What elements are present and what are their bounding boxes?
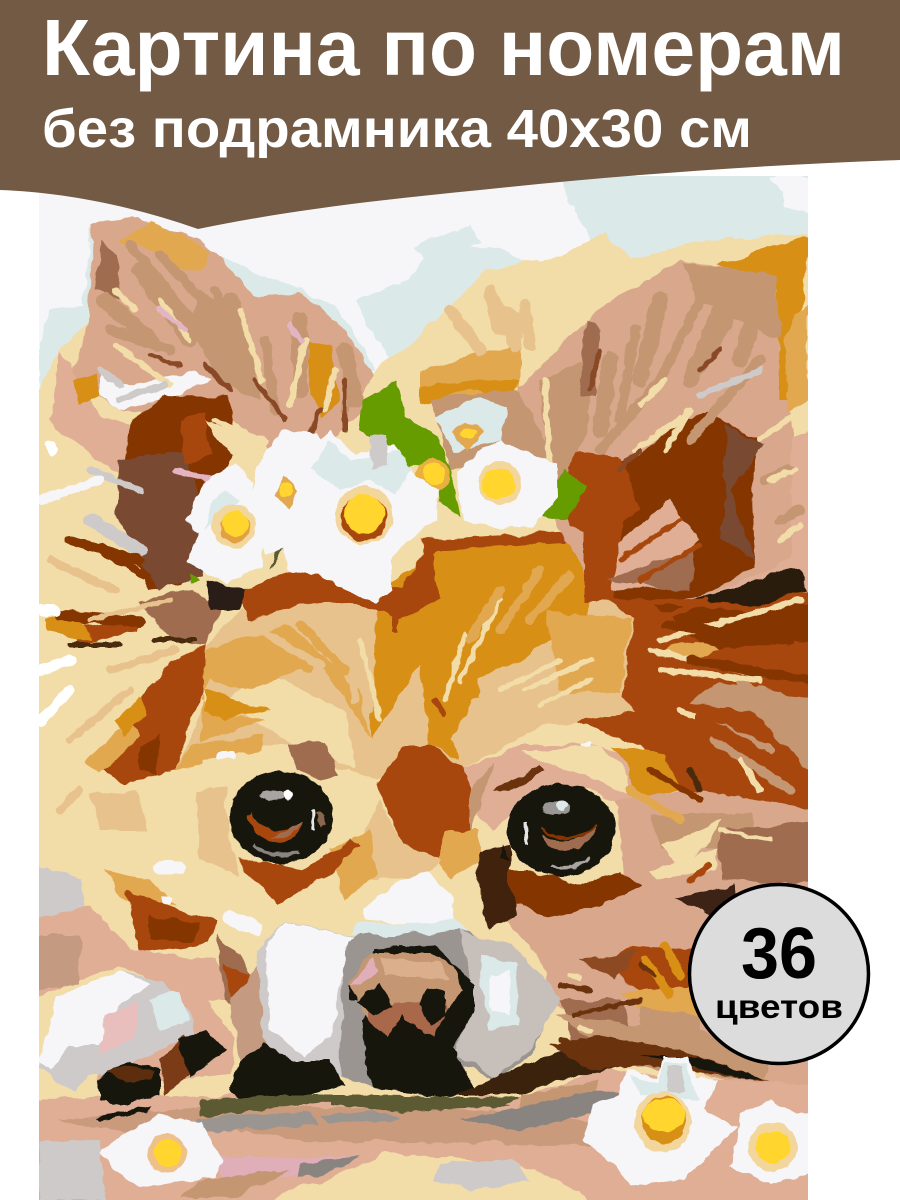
ground details [39, 1112, 600, 1200]
daisy bottom right small [730, 1100, 815, 1183]
painting: pomeranian dog with daisies [20, 160, 830, 1200]
painting background [39, 176, 808, 388]
badge: 36 colours [690, 884, 868, 1064]
dark mouth left [229, 1043, 345, 1098]
daisy right [457, 440, 558, 528]
forehead rust band [420, 530, 584, 576]
rust band under the daisy crown [242, 554, 440, 622]
daisy small back top [435, 397, 507, 453]
left ear [50, 217, 372, 480]
eye right [500, 784, 615, 876]
header banner [0, 0, 900, 229]
nose pink [350, 953, 463, 1037]
badge: 36 colours: 36 [741, 914, 817, 994]
mouth right [455, 1047, 630, 1095]
left ear dark area [116, 395, 236, 590]
fur strokes [42, 245, 808, 1060]
daisy bottom right large [583, 1057, 737, 1185]
under eye rust right [507, 869, 642, 918]
center rust between eyes [376, 745, 480, 860]
daisy bottom left [99, 1115, 222, 1187]
white patch above nose [363, 870, 455, 925]
left side fur [113, 513, 127, 534]
subtitle: без подрамника 40х30 см [42, 99, 752, 159]
eye brow left [289, 742, 340, 780]
right eye surroundings [465, 745, 680, 830]
nostrils [357, 985, 393, 1016]
paw [39, 970, 195, 1090]
daisy center [283, 430, 439, 603]
black fold on right ear [695, 570, 808, 605]
forehead [175, 600, 634, 780]
lower right [507, 892, 808, 1086]
nose and mouth [95, 945, 770, 1130]
badge: 36 colours: цветов [715, 988, 843, 1025]
left cheek [125, 764, 202, 800]
daisy crown [186, 397, 558, 603]
title: Картина по номерам [42, 3, 845, 92]
dog body silhouette [39, 216, 808, 1102]
tan area under the top daisy [430, 392, 560, 470]
right cheek [614, 790, 808, 898]
muzzle and paw [20, 870, 820, 1200]
far left lower [39, 867, 84, 918]
white muzzle left [258, 920, 362, 1075]
small yellow center [416, 458, 450, 492]
daisy left [186, 463, 262, 583]
right ear dark area [613, 412, 760, 600]
right side fur [576, 592, 808, 810]
patch above left eye [199, 745, 275, 790]
right ear [420, 232, 806, 336]
paw toes [97, 1062, 160, 1105]
nose black [363, 945, 477, 1097]
grey band [340, 925, 560, 1090]
leaves [190, 380, 587, 610]
left ear white stripe [100, 370, 210, 410]
lower zone [20, 1070, 820, 1200]
bottom daisies [99, 1057, 815, 1187]
white highlights [160, 744, 590, 928]
daisy back left [250, 430, 345, 555]
eye left [229, 771, 333, 863]
under eye rust left [236, 838, 358, 905]
